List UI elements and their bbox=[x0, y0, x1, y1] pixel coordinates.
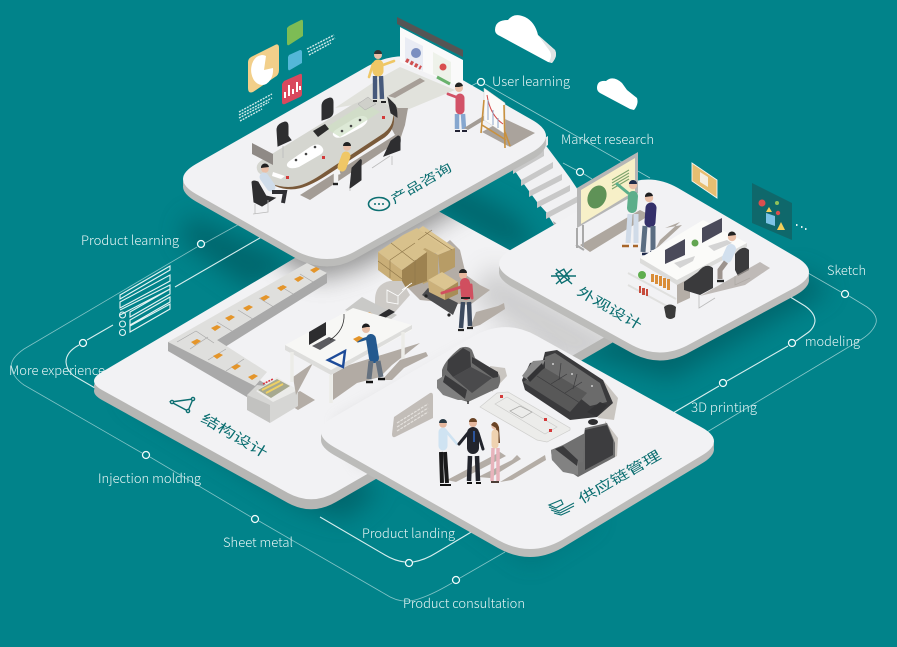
whiteboard shadow bbox=[580, 210, 650, 252]
speech bubble gray bbox=[392, 393, 433, 437]
label: Sketch: Sketch bbox=[827, 260, 866, 279]
monitor bbox=[702, 218, 722, 243]
floating app icons bbox=[239, 20, 335, 121]
label: Product consultation: Product consultation bbox=[403, 593, 525, 612]
shadows bbox=[447, 452, 546, 482]
office desk bbox=[628, 218, 747, 311]
text: 结构设计 with icon bbox=[170, 397, 270, 461]
icon: blue tile bbox=[288, 50, 302, 70]
label: Market research: Market research bbox=[561, 129, 654, 148]
flip chart bbox=[481, 88, 510, 148]
presenter in yellow bbox=[369, 50, 425, 102]
title: 产品咨询: 产品咨询 bbox=[388, 161, 455, 207]
icon: cloud small bbox=[597, 78, 638, 110]
title: 供应链管理: 供应链管理 bbox=[575, 447, 664, 507]
chairs bbox=[252, 98, 400, 206]
title: 外观设计: 外观设计 bbox=[574, 284, 645, 333]
shadow behind boxes bbox=[400, 240, 490, 305]
meeting table shadow bbox=[300, 100, 405, 200]
upper lines bbox=[467, 83, 650, 179]
icon: green tile bbox=[287, 20, 303, 45]
wall screen bbox=[397, 17, 463, 88]
front stack bbox=[378, 235, 427, 270]
small sign tile bbox=[252, 143, 273, 165]
monitor bbox=[665, 239, 685, 264]
worker shadow bbox=[470, 303, 505, 328]
cardboard boxes bbox=[378, 226, 455, 290]
sofa bbox=[522, 350, 618, 420]
icon: cloud large bbox=[495, 15, 556, 63]
man in suit bbox=[459, 418, 483, 483]
label: modeling: modeling bbox=[805, 331, 860, 350]
worker in blue bbox=[353, 323, 428, 382]
outer loop line bbox=[11, 222, 505, 601]
work desk bbox=[285, 308, 420, 403]
icon: pencil ruler bbox=[551, 269, 576, 284]
coffee table bbox=[480, 392, 570, 442]
connector nodes bbox=[80, 78, 848, 584]
stairs bbox=[505, 136, 600, 229]
icon: chat bubble bbox=[368, 198, 390, 210]
label: More experience: More experience bbox=[9, 360, 105, 379]
wastebasket bbox=[664, 304, 676, 319]
man in light blue shirt bbox=[439, 419, 457, 485]
woman bbox=[491, 422, 500, 482]
stair opening shadow bbox=[482, 119, 535, 147]
office chairs bbox=[684, 248, 749, 295]
icon: red chart tile bbox=[282, 74, 302, 104]
books bbox=[651, 274, 670, 290]
seated man in yellow bbox=[333, 142, 351, 184]
panel: right platform 外观设计 bbox=[499, 152, 809, 360]
label: User learning: User learning bbox=[492, 71, 570, 90]
office worker bbox=[717, 231, 736, 281]
label: Product landing: Product landing bbox=[362, 523, 455, 542]
panel: bottom platform 供应链管理 bbox=[321, 327, 714, 557]
presenter in pink bbox=[448, 82, 488, 131]
armchair left bbox=[437, 347, 507, 404]
projection light cone bbox=[335, 67, 455, 115]
white table pills bbox=[287, 144, 323, 168]
title: 结构设计: 结构设计 bbox=[198, 411, 270, 461]
machine with scan nodes bbox=[345, 281, 412, 341]
icon: list lines bbox=[120, 266, 170, 336]
connector lines bbox=[11, 83, 876, 601]
cork board bbox=[692, 163, 717, 198]
control box bbox=[247, 377, 298, 423]
right loop outer line bbox=[707, 273, 876, 432]
right loop inner line bbox=[673, 295, 815, 413]
meeting table bbox=[257, 97, 394, 189]
pallet cart with worker bbox=[422, 269, 505, 330]
panel: left platform 结构设计 bbox=[94, 212, 613, 510]
label: Product learning: Product learning bbox=[81, 230, 179, 249]
middle stack bbox=[417, 248, 438, 284]
label: Sheet metal: Sheet metal bbox=[223, 532, 293, 551]
label: 3D printing: 3D printing bbox=[691, 397, 757, 416]
inner loop line bbox=[66, 325, 473, 562]
whiteboard bbox=[576, 152, 638, 250]
label: Injection molding: Injection molding bbox=[98, 468, 201, 487]
dark speech bubble with shapes bbox=[752, 183, 806, 240]
ellipsis bbox=[796, 225, 806, 229]
scribble captions bbox=[307, 35, 335, 55]
conveyor belt bbox=[168, 263, 327, 410]
text labels bbox=[9, 71, 866, 612]
icon: triangle nodes bbox=[170, 397, 195, 413]
icon: layers bbox=[549, 500, 574, 515]
panel: top platform 产品咨询 bbox=[183, 17, 546, 266]
man in green bbox=[617, 180, 638, 246]
seated man in blue bbox=[261, 163, 285, 203]
back stack bbox=[410, 226, 455, 255]
teal shadows beneath platforms bbox=[120, 175, 830, 565]
people shaking hands bbox=[439, 418, 546, 485]
man in navy bbox=[642, 192, 682, 254]
icon: pie tile bbox=[248, 44, 279, 92]
list connector line bbox=[175, 235, 265, 287]
armchair right bbox=[551, 419, 618, 477]
icon: blue triangle ruler bbox=[328, 351, 345, 367]
